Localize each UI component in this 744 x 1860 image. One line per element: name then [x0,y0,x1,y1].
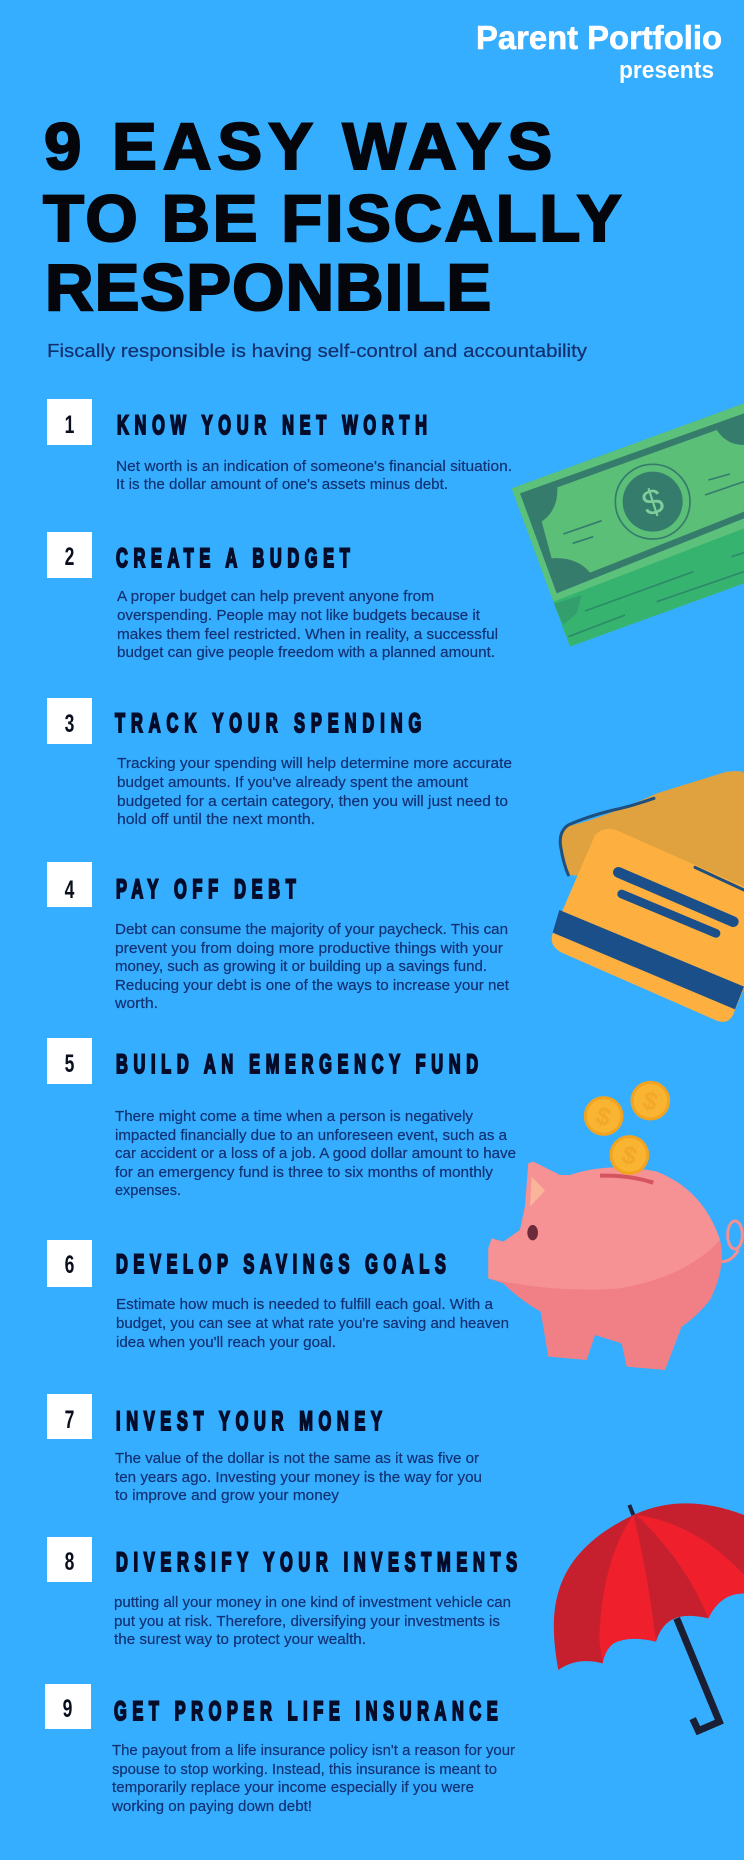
heading 9: GET PROPER LIFE INSURANCE [114,1696,498,1726]
number box 6 [47,1240,92,1287]
step 2 [47,532,498,661]
body text 7: ten years ago. Investing your money is the way for you [115,1469,482,1486]
body text 2: overspending. People may not like budgets because it [117,607,481,624]
body text 6: budget, you can see at what rate you're saving and heaven [116,1315,509,1332]
body text 1 [116,458,512,493]
heading 7: INVEST YOUR MONEY [116,1406,382,1436]
title: TO BE FISCALLY [43,183,622,256]
body text 5: expenses. [115,1182,181,1199]
step 7 [47,1394,482,1504]
body text 3: hold off until the next month. [117,811,315,828]
illustration: piggy bank with coins: $ [639,1086,661,1117]
body text 2 [117,588,498,661]
body text 7: The value of the dollar is not the same as it was five or [115,1450,479,1467]
number box 8: 8 [65,1547,74,1576]
number box 2: 2 [65,542,74,571]
number box 9 [45,1684,91,1729]
heading 8: DIVERSIFY YOUR INVESTMENTS [116,1547,517,1577]
body text 4: Debt can consume the majority of your paycheck. This can [115,921,508,938]
body text 1: It is the dollar amount of one's assets minus debt. [116,476,448,493]
body text 5: car accident or a loss of a job. A good dollar amount to have [115,1145,516,1162]
brand logo [476,19,722,84]
number box 5: 5 [65,1049,74,1078]
body text 6: Estimate how much is needed to fulfill each goal. With a [116,1296,494,1313]
body text 3 [117,755,512,828]
body text 7: to improve and grow your money [115,1487,340,1504]
body text 6: idea when you'll reach your goal. [116,1334,336,1351]
body text 4: money, such as growing it or building up a savings fund. [115,958,487,975]
illustration: red umbrella [554,1503,744,1731]
heading 3: TRACK YOUR SPENDING [115,708,421,738]
illustration: piggy bank with coins: $ [618,1140,640,1171]
title: RESPONBILE [45,252,491,325]
body text 4: worth. [114,995,158,1012]
number box 3 [47,698,92,744]
number box 2 [47,532,92,578]
brand logo: Parent Portfolio [476,19,722,56]
body text 5: There might come a time when a person is negatively [115,1108,473,1125]
step 8 [47,1537,517,1648]
number box 3: 3 [65,709,74,738]
body text 7 [115,1450,482,1504]
body text 9: working on paying down debt! [111,1798,312,1815]
body text 3: Tracking your spending will help determine more accurate [117,755,512,772]
heading 2: CREATE A BUDGET [116,543,350,573]
body text 9: spouse to stop working. Instead, this insurance is meant to [112,1761,497,1778]
number box 7 [47,1394,92,1439]
number box 8 [47,1537,92,1582]
brand logo: presents [619,57,714,84]
number box 6: 6 [65,1250,74,1279]
body text 9 [111,1742,515,1815]
number box 1 [47,399,92,445]
body text 6 [116,1296,509,1351]
title: 9 EASY WAYS [44,111,552,184]
illustration: wallet and credit card [552,771,744,1022]
body text 3: budget amounts. If you've already spent the amount [117,774,469,791]
step 9 [45,1684,515,1815]
heading 6: DEVELOP SAVINGS GOALS [116,1249,446,1279]
step 6 [47,1240,509,1351]
step 3 [47,698,512,828]
body text 4 [114,921,510,1012]
body text 8: put you at risk. Therefore, diversifying your investments is [114,1613,500,1630]
heading 5: BUILD AN EMERGENCY FUND [116,1049,478,1079]
body text 8 [114,1594,511,1648]
body text 9: temporarily replace your income especially if you were [112,1779,474,1796]
heading 4: PAY OFF DEBT [116,874,296,904]
step 1 [47,399,512,493]
body text 4: Reducing your debt is one of the ways to increase your net [115,977,510,994]
body text 4: prevent you from doing more productive things with your [115,940,503,957]
body text 1: Net worth is an indication of someone's financial situation. [116,458,512,475]
illustration: piggy bank with coins: $ [592,1101,614,1132]
illustration: stack of money: $ [637,479,669,524]
step 4 [47,862,510,1012]
body text 5: impacted financially due to an unforeseen event, such as a [115,1127,508,1144]
body text 8: putting all your money in one kind of investment vehicle can [114,1594,511,1611]
number box 1: 1 [65,410,74,439]
number box 7: 7 [65,1405,74,1434]
body text 2: A proper budget can help prevent anyone from [117,588,434,605]
number box 5 [47,1038,92,1084]
body text 3: budgeted for a certain category, then you will just need to [117,793,508,810]
body text 8: the surest way to protect your wealth. [114,1631,366,1648]
heading 1: KNOW YOUR NET WORTH [117,410,427,440]
title [43,111,622,325]
body text 9: The payout from a life insurance policy isn't a reason for your [112,1742,515,1759]
step 5 [47,1038,516,1199]
number box 9: 9 [63,1694,72,1723]
body text 2: budget can give people freedom with a planned amount. [117,644,495,661]
illustration: stack of money [512,403,744,647]
body text 5 [115,1108,516,1199]
number box 4 [47,862,92,907]
illustration: piggy bank with coins [488,1082,742,1370]
body text 5: for an emergency fund is three to six months of monthly [115,1164,493,1181]
number box 4: 4 [65,875,74,904]
body text 2: makes them feel restricted. When in reality, a successful [117,626,498,643]
subtitle: Fiscally responsible is having self-control and accountability [47,340,588,361]
